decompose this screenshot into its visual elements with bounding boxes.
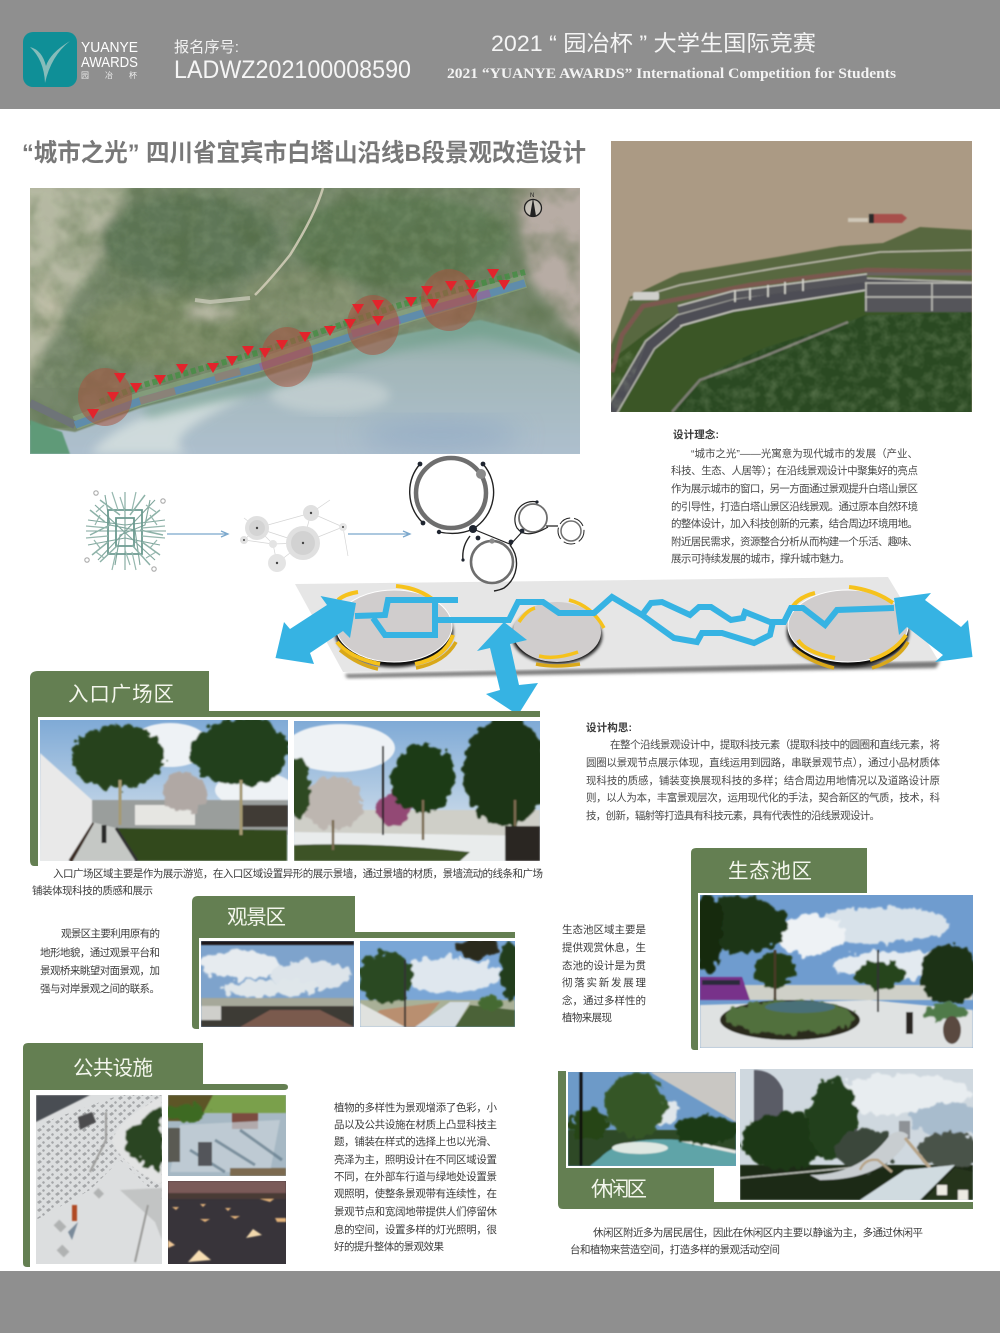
aerial river photo [611,141,972,420]
registration number: LADWZ202100008590 [174,56,411,84]
photo 1 [40,718,295,861]
concept text: 附近居民需求，资源整合分析从而构建一个乐活、趣味、 [671,535,918,548]
circulation diagram [276,577,972,715]
body text: 题，铺装在样式的选择上也以光滑、 [334,1135,497,1148]
riverside road strip [75,281,525,423]
arrow: right exit [894,593,972,662]
heading: 生态池区 [728,860,812,883]
photo: paving [36,1095,162,1264]
north arrow: N [530,193,534,199]
body text [562,923,646,1024]
design idea text [586,721,940,822]
pier [633,292,659,300]
concept text: 科技、生态、人居等）；在沿线景观设计中聚集好的亮点 [671,464,918,477]
caption: 铺装体现科技的质感和展示 [32,884,153,897]
design idea text: 在整个沿线景观设计中，提取科技元素（提取科技中的圆圈和直线元素，将 [610,738,940,751]
body text: 强与对岸景观之间的联系。 [40,982,160,995]
concept text: 作为展示城市的窗口，另一方面通过景观提升白塔山景区 [671,482,918,495]
body text: 好的提升整体的景观效果 [334,1240,444,1253]
riverbank vegetation [611,227,972,420]
body text: 不同，在外部车行道与绿地处设置景 [334,1170,497,1183]
body text: 念，通过多样性的 [562,994,646,1007]
heading: 观景区 [227,906,286,929]
caption [32,867,543,897]
red planting markers [87,269,510,419]
body text: 提供观赏休息，生 [562,941,646,954]
photo 1 [568,1072,737,1166]
heading: 休闲区 [591,1178,647,1201]
forest [672,312,972,420]
logo: 园 冶 杯 [81,70,137,80]
body text [334,1101,498,1253]
panel frame [691,848,867,1050]
logo: YUANYE [81,39,138,56]
panel frame [192,896,515,1029]
base plate [295,577,940,678]
concept text: 的引导性，打造白塔山景区沿线景观。通过原本自然环境 [671,500,918,513]
panel frame [30,671,540,866]
body text: 亮泽为主，照明设计在不同区域设置 [334,1153,497,1166]
panel: ecological pond [562,848,980,1050]
panel: public facilities [23,1043,498,1267]
body text: 观景区主要利用原有的 [61,927,160,940]
body text: 息的空间，设置多样的灯光照明，很 [334,1223,498,1236]
panel: leisure zone [558,1069,990,1256]
cycle path [612,270,972,372]
arrow: south exit [477,622,538,715]
concept text: “城市之光”——光寓意为现代城市的发展（产业、 [691,447,918,460]
node circle 2 [512,600,604,666]
carriageway [611,284,972,412]
blue route [355,597,894,643]
concept text: 展示可持续发展的城市，撑升城市魅力。 [671,552,850,565]
panel: viewing zone [40,896,520,1029]
body text: 地形地貌，通过观景平台和 [40,946,160,959]
body text: 观照明，使整条景观带有连续性，在 [334,1187,497,1200]
registration label: 报名序号: [174,39,239,56]
caption: 休闲区附近多为居民居住，因此在休闲区内主要以静谧为主，多通过休闲平 [593,1226,923,1239]
icon: tech rings [410,458,584,591]
body text: 景观桥来眺望对面景观，加 [40,964,160,977]
design idea text: 技，创新，辐射等打造具有科技元素，具有代表性的沿线景观设计。 [586,809,880,822]
caption [570,1226,923,1256]
photo 2 [740,1069,990,1200]
panel frame [23,1043,288,1267]
icon: circuit tree [85,491,166,571]
heading: 公共设施 [73,1057,153,1080]
icon: node network [240,500,348,572]
logo [23,32,138,87]
body text: 生态池区域主要是 [562,923,646,936]
body text: 植物的多样性为景观增添了色彩，小 [334,1101,498,1114]
design idea text: 则，以人为本，丰富景观层次，运用现代化的手法，契合新区的气质，技术，科 [586,791,940,804]
concept text [671,428,918,565]
barge [869,214,907,223]
mountain road [255,188,323,295]
photo [694,895,980,1048]
caption: 台和植物来营造空间，打造多样的景观活动空间 [570,1243,780,1256]
panel: entrance plaza [30,671,547,897]
heading: 入口广场区 [68,683,174,706]
node circle 3 [787,587,909,668]
arrow: left exit [276,596,356,664]
caption: 入口广场区域主要是作为展示游览，在入口区域设置异形的展示景墙，通过景墙的材质，景墙流动的线条和广场 [53,867,543,880]
photo 1 [200,941,354,1027]
logo: AWARDS [81,54,138,71]
design idea text: 现科技的质感，铺装变换展现科技的多样；结合周边用地情况以及道路设计原 [586,774,940,787]
design idea text: 设计构思: [586,721,632,734]
arrow: circuit to network [167,531,228,537]
hatched node circles [78,269,477,426]
body text: 植物来展现 [562,1011,612,1024]
concept text: 的整体设计，加入科技创新的元素，结合周边环境用地。 [671,517,918,530]
body text: 态池的设计是为贯 [562,959,646,972]
competition title english: 2021 “YUANYE AWARDS” International Competition for Students [447,66,896,82]
body text: 彻落实新发展理 [562,976,646,989]
photo 2 [285,718,547,861]
photo: seating [163,1095,286,1176]
river water [30,320,590,460]
design idea text: 圆圈以景观节点展示体现，直线运用到园路，串联景观节点），通过小品材质体 [586,756,940,769]
node circle 1 [335,586,456,669]
body text: 品以及公共设施在材质上凸显科技主 [334,1118,497,1131]
panel frame [558,1071,973,1209]
photo: ground lights [168,1181,286,1264]
arrow: network to rings [348,531,410,537]
north arrow [524,193,542,216]
header band [0,0,1000,109]
body text: 景观节点和宽阔地带提供人们停留休 [334,1205,498,1218]
footer band [0,1271,1000,1333]
site master plan map [20,180,590,460]
competition title chinese: 2021 “ 园冶杯 ” 大学生国际竞赛 [491,31,816,56]
body text [40,927,160,995]
concept text: 设计理念: [673,428,719,441]
main title: “城市之光” 四川省宜宾市白塔山沿线B段景观改造设计 [22,138,586,167]
photo 2 [358,939,520,1027]
